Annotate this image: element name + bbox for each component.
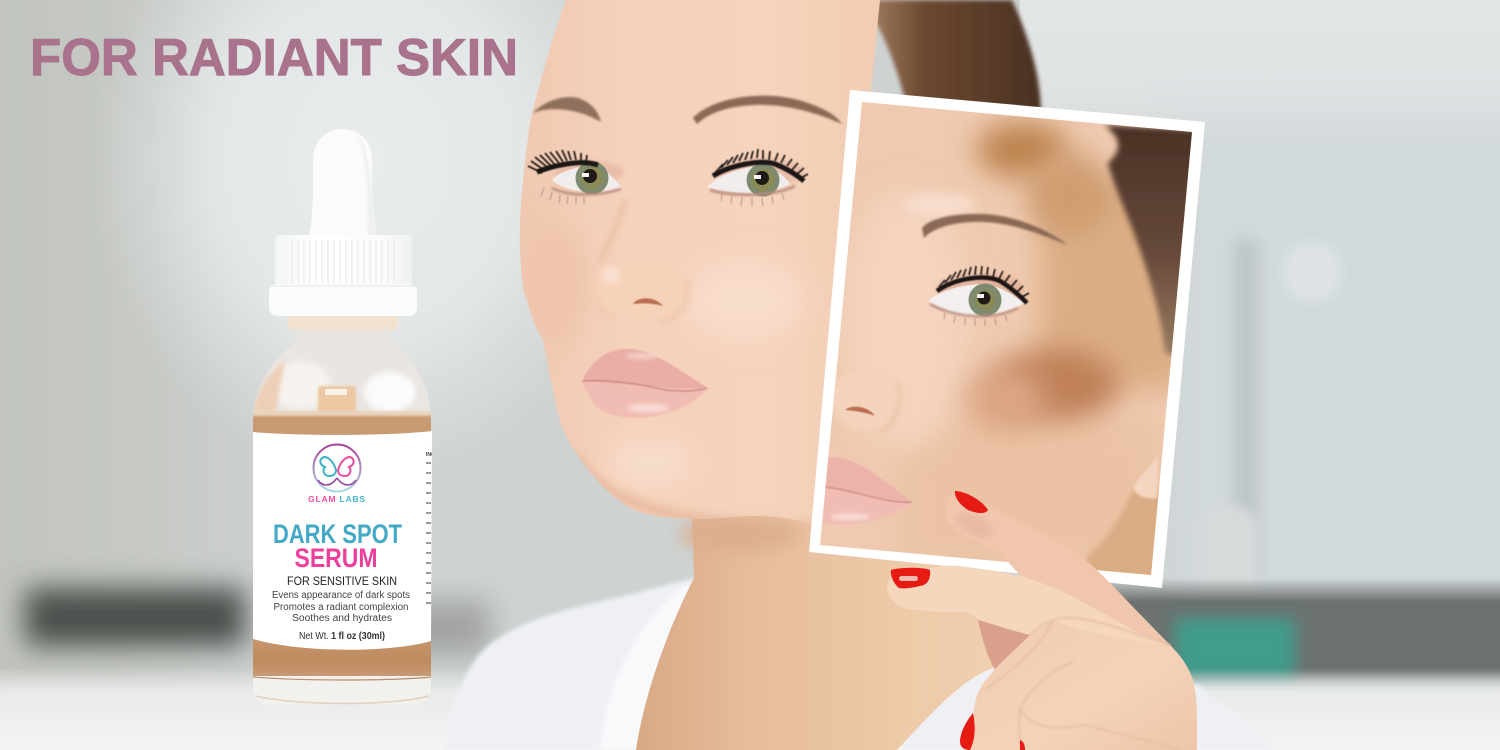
white shirt <box>445 578 1280 750</box>
left eyebrow <box>533 97 601 122</box>
nose <box>594 258 688 322</box>
middle finger <box>887 566 1172 647</box>
lips <box>582 349 708 418</box>
nail: index <box>955 491 988 513</box>
facial shading <box>547 248 575 320</box>
knuckle creases <box>985 618 1180 750</box>
nail: ring <box>960 713 975 750</box>
hand holding the photo <box>887 491 1197 750</box>
face <box>520 0 880 530</box>
right eye <box>707 149 808 206</box>
photo hair <box>1105 125 1200 360</box>
photo eye <box>936 273 1024 296</box>
right eyebrow <box>693 96 842 124</box>
title: FOR RADIANT SKIN <box>30 29 518 87</box>
tucked finger <box>978 620 1034 670</box>
left eye <box>528 150 624 204</box>
product label <box>253 431 439 650</box>
photo lips <box>825 457 912 502</box>
serum bottle <box>253 129 439 706</box>
held photo with dark spots <box>809 90 1205 588</box>
dark spot: forehead <box>976 122 1068 178</box>
dark spot: cheek <box>991 349 1119 421</box>
photo skin <box>810 95 1200 585</box>
glass body and serum <box>253 316 431 706</box>
photo nose <box>833 381 863 427</box>
ribbed cap <box>269 235 417 316</box>
product name: DARK SPOT <box>273 519 402 549</box>
net weight: Net Wt. 1 fl oz (30ml) <box>299 631 385 642</box>
photo eyebrow <box>922 214 1068 245</box>
index finger <box>945 492 1172 647</box>
skin type: FOR SENSITIVE SKIN <box>287 576 397 588</box>
side ingredients text: INGR <box>426 452 439 458</box>
photo neck shadow <box>1084 488 1159 575</box>
brand name: GLAM LABS <box>308 494 366 504</box>
woman portrait <box>445 0 1280 750</box>
benefits: Promotes a radiant complexion <box>274 602 408 613</box>
nail: pinky <box>1020 740 1025 750</box>
butterfly logo <box>314 444 360 492</box>
hair <box>862 0 1041 110</box>
knuckles and palm <box>970 615 1197 750</box>
dropper bulb <box>309 129 377 236</box>
benefits: Soothes and hydrates <box>292 613 392 624</box>
nail: middle <box>891 568 930 588</box>
neck <box>636 505 1010 750</box>
benefits: Evens appearance of dark spots <box>272 590 410 601</box>
benefits <box>272 590 410 624</box>
product label: SERUM <box>294 543 378 573</box>
photo ear <box>1134 455 1158 499</box>
